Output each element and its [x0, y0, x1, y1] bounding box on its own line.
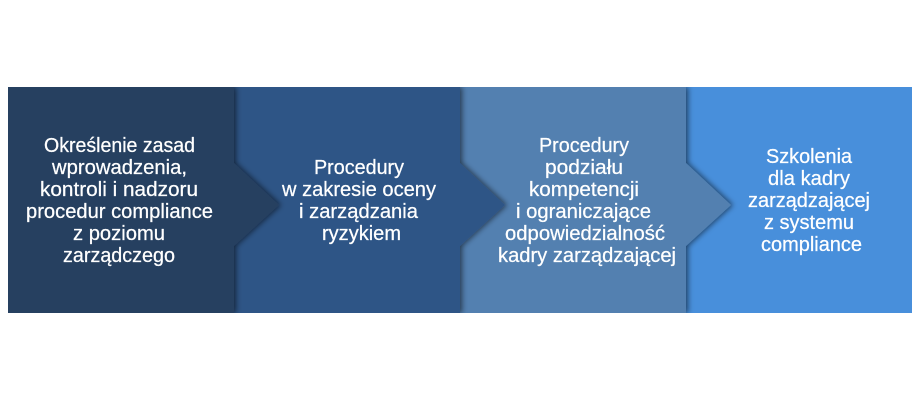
panel 4 background [686, 87, 912, 313]
panel 2 text [281, 157, 436, 245]
panel 3 background with arrow [460, 87, 736, 313]
panel 1 text: procedur compliance [26, 201, 213, 223]
panel 3 text: i ograniczające [516, 201, 651, 223]
panel 2 background with arrow [234, 87, 509, 313]
panel 1 text: Określenie zasad [44, 135, 195, 157]
process chevron diagram [8, 87, 912, 313]
panel 2 text: w zakresie oceny [281, 179, 436, 201]
panel 1 text [26, 135, 213, 267]
panel 4 text: z systemu [764, 212, 854, 234]
panel 4 text: compliance [761, 234, 862, 256]
panel 4 text: Szkolenia [766, 146, 853, 168]
panel 1 text: kontroli i nadzoru [40, 179, 198, 201]
panel 2 text: ryzykiem [322, 223, 401, 245]
panel 4 text: zarządzającej [748, 190, 870, 212]
panel 3 text: odpowiedzialność [505, 223, 665, 245]
panel 4 text: dla kadry [768, 168, 850, 190]
panel 1 text: z poziomu [73, 223, 165, 245]
panel 3 text [498, 135, 676, 267]
panel 1 text: zarządczego [63, 245, 175, 267]
panel 3 text: Procedury [539, 135, 629, 157]
panel 4 text [748, 146, 870, 256]
panel 2 text: i zarządzania [299, 201, 419, 223]
panel 3 text: podziału [545, 157, 623, 179]
panel 1 text: wprowadzenia, [51, 157, 187, 179]
panel 1 background with arrow [8, 87, 279, 313]
panel 2 text: Procedury [314, 157, 404, 179]
panel 3 text: kompetencji [529, 179, 639, 201]
panel backgrounds with arrows [8, 87, 912, 313]
panel 3 text: kadry zarządzającej [498, 245, 676, 267]
